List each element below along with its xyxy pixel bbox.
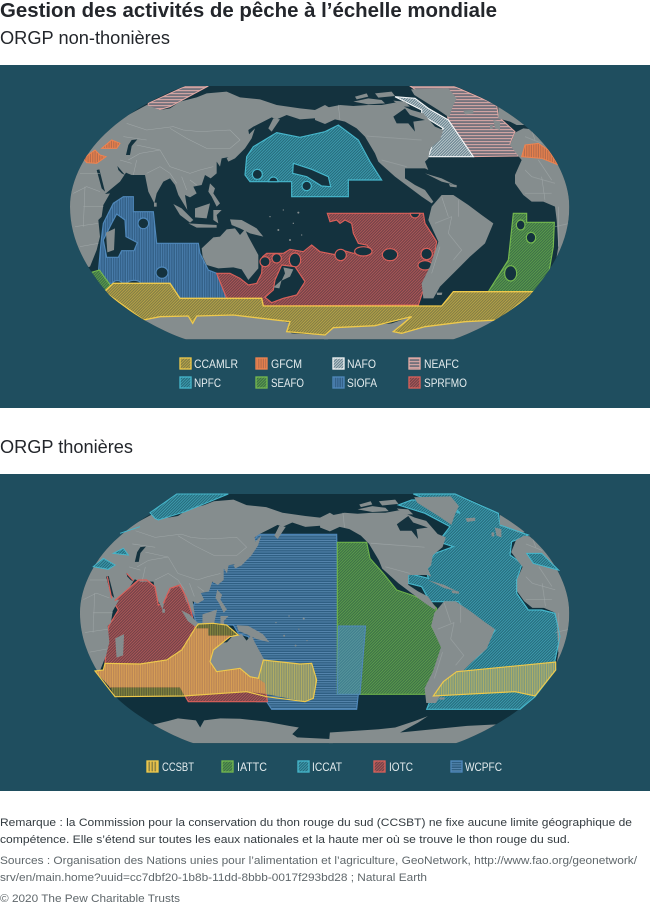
panel: non-tuna map background — [0, 65, 650, 408]
note text — [0, 817, 632, 846]
zone: GFCM — [83, 140, 558, 165]
world map: non-tuna RFMOs — [60, 86, 578, 347]
zone: ICCAT enclosed seas — [93, 494, 560, 660]
legend: non-tuna RFMOs: NEAFC — [424, 357, 459, 371]
zone: CCSBT — [95, 623, 556, 702]
subtitle: ORGP thonières: ORGP thonières — [0, 437, 133, 457]
zone: WCPFC — [192, 534, 366, 709]
legend: non-tuna RFMOs: SIOFA — [347, 376, 377, 390]
zone: ICCAT — [398, 494, 560, 709]
panel: tuna map background — [0, 474, 650, 791]
zone: NPFC — [245, 125, 382, 197]
legend: tuna RFMOs: ICCAT — [312, 760, 343, 774]
land masses — [70, 496, 578, 751]
legend: non-tuna RFMOs: CCAMLR — [194, 357, 238, 371]
world map: tuna RFMOs — [70, 494, 578, 751]
legend: non-tuna RFMOs: NAFO — [347, 357, 376, 371]
legend: tuna RFMOs: CCSBT — [162, 760, 195, 774]
zone: CCAMLR — [104, 283, 535, 335]
note text: Remarque : la Commission pour la conservation du thon rouge du sud (CCSBT) ne fixe aucune limite géographique de — [0, 817, 632, 829]
legend: non-tuna RFMOs: GFCM — [271, 357, 302, 371]
subtitle: ORGP non-thonières: ORGP non-thonières — [0, 28, 170, 48]
zone: IOTC — [105, 580, 267, 702]
note text: compétence. Elle s’étend sur toutes les eaux nationales et la haute mer où se trouve le thon rouge du sud. — [0, 834, 570, 846]
legend: tuna RFMOs: IATTC — [237, 760, 267, 774]
sources text: srv/en/main.home?uuid=cc7dbf20-1b8b-11dd-8bbb-0017f293bd28 ; Natural Earth — [0, 872, 427, 884]
legend: non-tuna RFMOs: SPRFMO — [424, 376, 467, 390]
sources text — [0, 855, 638, 884]
zone: IOTC coast outline — [107, 573, 192, 613]
zone: SIOFA — [98, 197, 227, 298]
sources text: Sources : Organisation des Nations unies pour l’alimentation et l’agriculture, GeoNetwork, http://www.fao.org/geonetwork/ — [0, 855, 638, 867]
zone: SEAFO — [88, 213, 554, 292]
zone: SPRFMO — [217, 213, 437, 306]
zone: IATTC and WCPFC overlap — [337, 626, 366, 694]
zone: NAFO — [395, 97, 473, 157]
legend: non-tuna RFMOs: SEAFO — [271, 376, 304, 390]
legend: non-tuna RFMOs: NPFC — [194, 376, 221, 390]
zone: NEAFC — [147, 86, 518, 157]
legend: tuna RFMOs: IOTC — [389, 760, 413, 774]
legend: non-tuna RFMOs — [180, 357, 467, 390]
legend: tuna RFMOs — [147, 760, 502, 774]
legend: tuna RFMOs: WCPFC — [465, 760, 502, 774]
land masses — [60, 88, 578, 347]
zone: IATTC — [337, 542, 443, 694]
